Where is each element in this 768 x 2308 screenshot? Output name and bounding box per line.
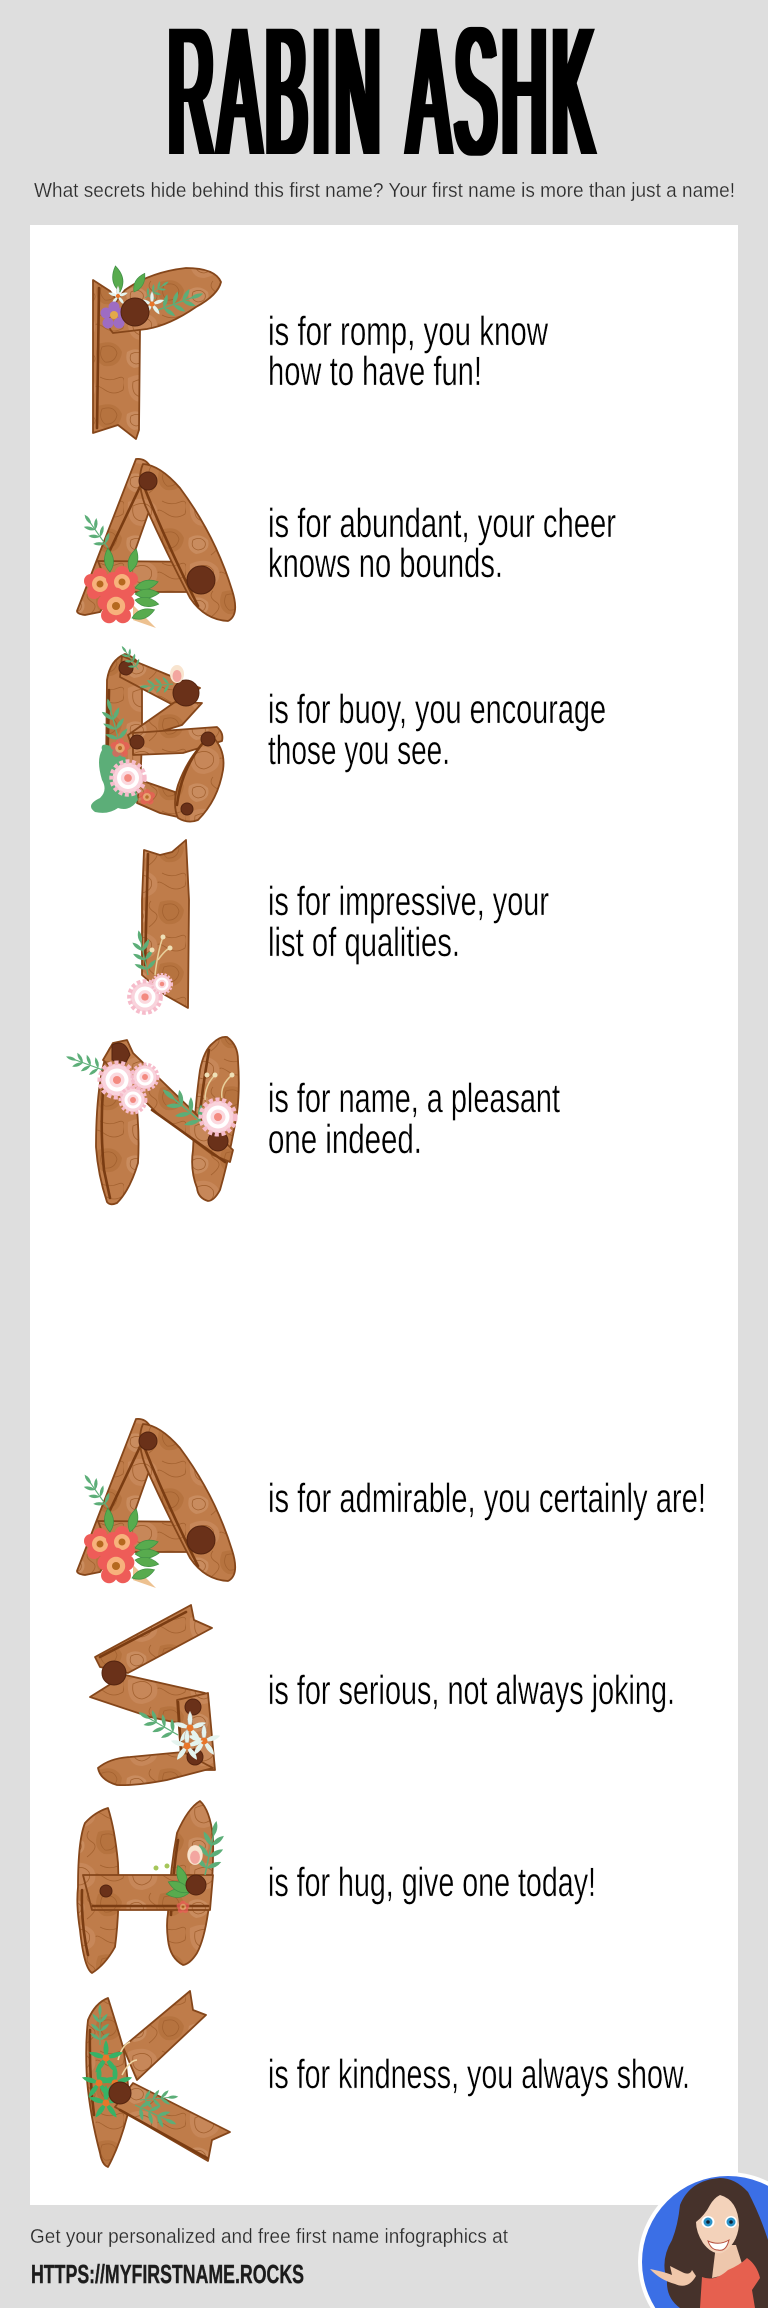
text: I line: is for impressive, your [268, 878, 549, 924]
letter I illustration [127, 840, 189, 1013]
footer: url: HTTPS://MYFIRSTNAME.ROCKS [31, 2259, 304, 2289]
second letter A illustration [76, 1419, 235, 1588]
text: N line: is for name, a pleasant [268, 1075, 560, 1121]
text: R line [268, 308, 548, 394]
text: R line: is for romp, you know [268, 308, 548, 354]
text: B line: those you see. [268, 727, 450, 773]
text: R line: how to have fun! [268, 348, 482, 394]
text: B line: is for buoy, you encourage [268, 686, 606, 732]
letter S illustration [90, 1605, 221, 1785]
subtitle: What secrets hide behind this first name? Your first name is more than just a name! [34, 180, 735, 202]
letter R row illustration: P-shaped plank [93, 265, 221, 439]
text: I line: list of qualities. [268, 919, 460, 965]
letter N illustration [62, 1037, 239, 1204]
text: A line: is for abundant, your cheer [268, 500, 616, 546]
letter K illustration [81, 1991, 230, 2167]
letter H illustration [77, 1801, 231, 1973]
text: I line [268, 878, 549, 965]
panel: letters [30, 225, 738, 2205]
avatar: cartoon woman in blue circle [638, 2172, 768, 2308]
letter A illustration [76, 459, 235, 628]
text: N line: one indeed. [268, 1116, 422, 1162]
text: A line: knows no bounds. [268, 540, 503, 586]
text: A line [268, 500, 616, 586]
footer: call to action: Get your personalized and free first name infographics at [30, 2226, 508, 2248]
text: H line: is for hug, give one today! [268, 1859, 596, 1905]
text: B line [268, 686, 606, 773]
letter B illustration [91, 642, 224, 822]
text: N line [268, 1075, 560, 1162]
